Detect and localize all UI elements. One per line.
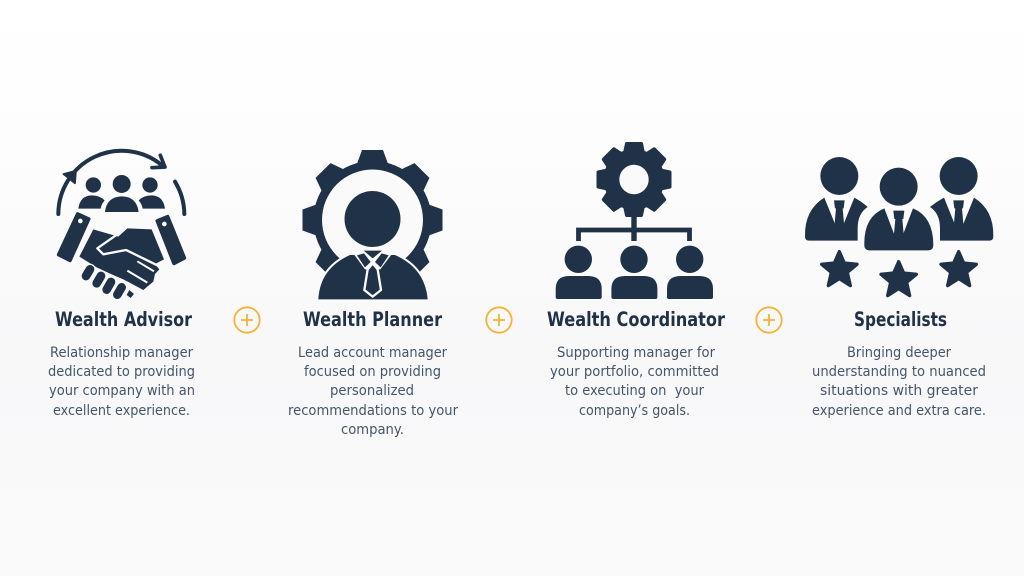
text block: your company with an [49,383,195,399]
text block [812,345,986,419]
text block: dedicated to providing [48,364,195,380]
text block: Lead account manager [298,345,447,361]
text block: Supporting manager for [557,345,715,361]
icon: plus connector 1 [234,307,260,333]
text block: Relationship manager [50,345,193,361]
heading: Wealth Coordinator [547,308,725,331]
text block [550,345,719,419]
text block: personalized [330,383,414,399]
panel: specialists [805,157,993,419]
text block [48,345,195,419]
panel: wealth planner [288,150,458,438]
text block [288,345,458,438]
icon: plus connector 3 [756,307,782,333]
icon: person in gear [302,150,442,299]
text block: recommendations to your [288,403,458,419]
heading: Wealth Planner [303,308,442,331]
text block: focused on providing [304,364,441,380]
icon: gear over team hierarchy [556,144,713,299]
text block: company. [341,422,404,438]
heading: Specialists [854,308,947,331]
text block: excellent experience. [53,403,190,419]
text block: understanding to nuanced [812,364,986,380]
icon: handshake with team [58,151,184,298]
heading: Wealth Advisor [55,308,192,331]
panel: wealth advisor [48,151,195,419]
text block: experience and extra care. [812,403,986,419]
text block: your portfolio, committed [550,364,719,380]
panel: wealth coordinator [547,144,725,419]
text block: Bringing deeper [847,345,951,361]
icon: three specialists with stars [805,157,993,296]
text block: to executing on your [565,383,704,399]
text block: situations with greater [820,383,978,399]
icon: plus connector 2 [486,307,512,333]
text block: company’s goals. [579,403,690,419]
